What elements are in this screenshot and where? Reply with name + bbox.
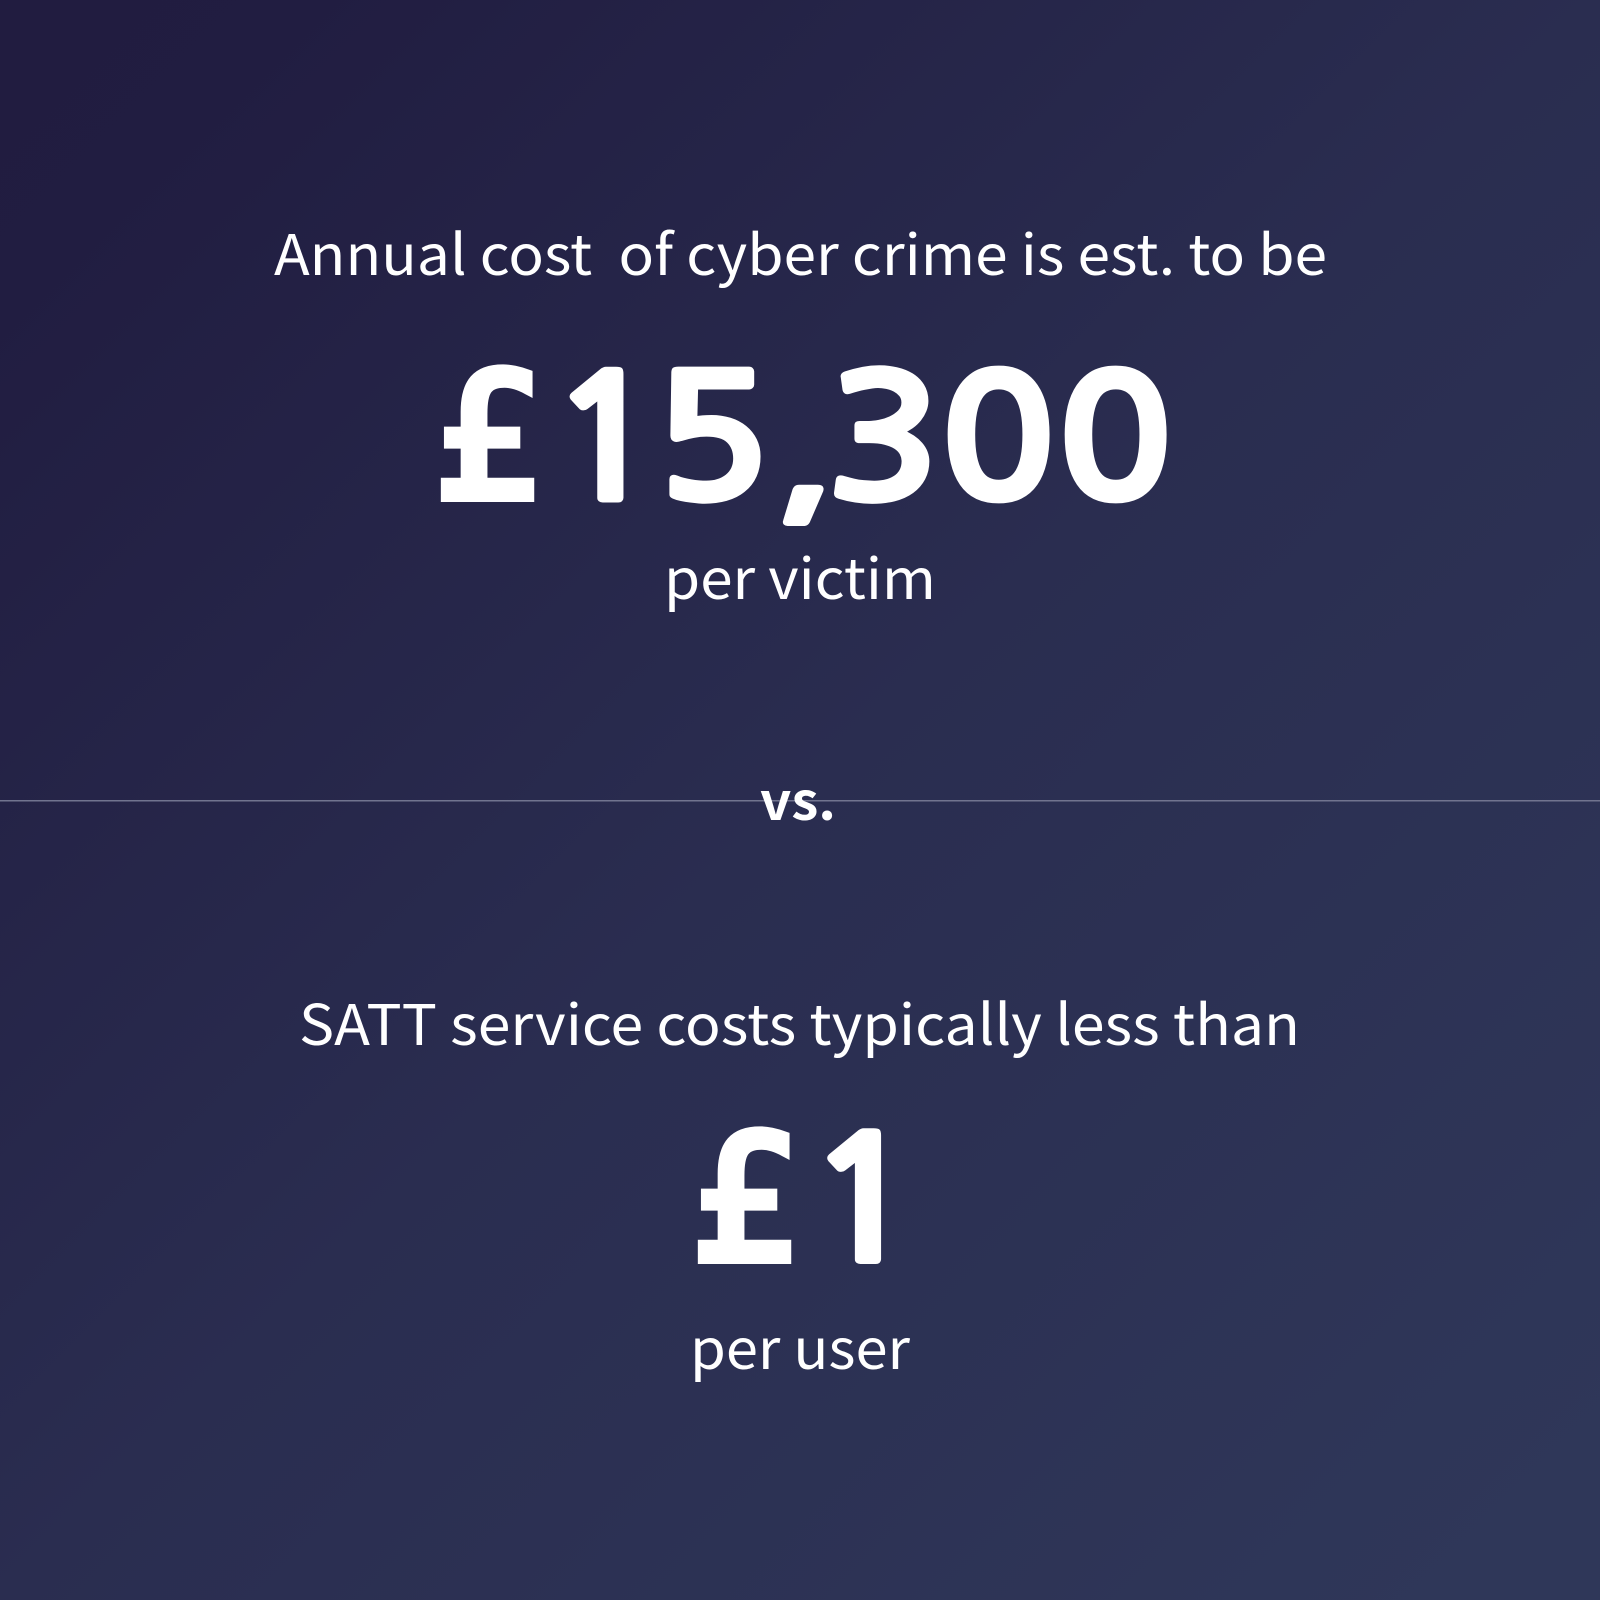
- panel: SATT service cost: [299, 981, 1300, 1386]
- figure: £15,300: 15,300: [548, 355, 1173, 526]
- heading: annual cost: Annual cost of cyber crime is est. to be: [274, 211, 1327, 292]
- heading: SATT service: SATT service costs typically less than: [299, 981, 1300, 1062]
- figure: £15,300: £: [435, 337, 544, 538]
- figure: £1: [692, 1099, 922, 1300]
- divider line: [0, 800, 1600, 802]
- caption: per user: per user: [690, 1305, 910, 1386]
- panel: cyber crime cost: [274, 211, 1327, 616]
- vs. label: vs.: [760, 760, 836, 835]
- caption: per victim: per victim: [664, 535, 936, 616]
- figure: £1: £: [692, 1099, 801, 1300]
- figure: £1: 1: [805, 1117, 922, 1287]
